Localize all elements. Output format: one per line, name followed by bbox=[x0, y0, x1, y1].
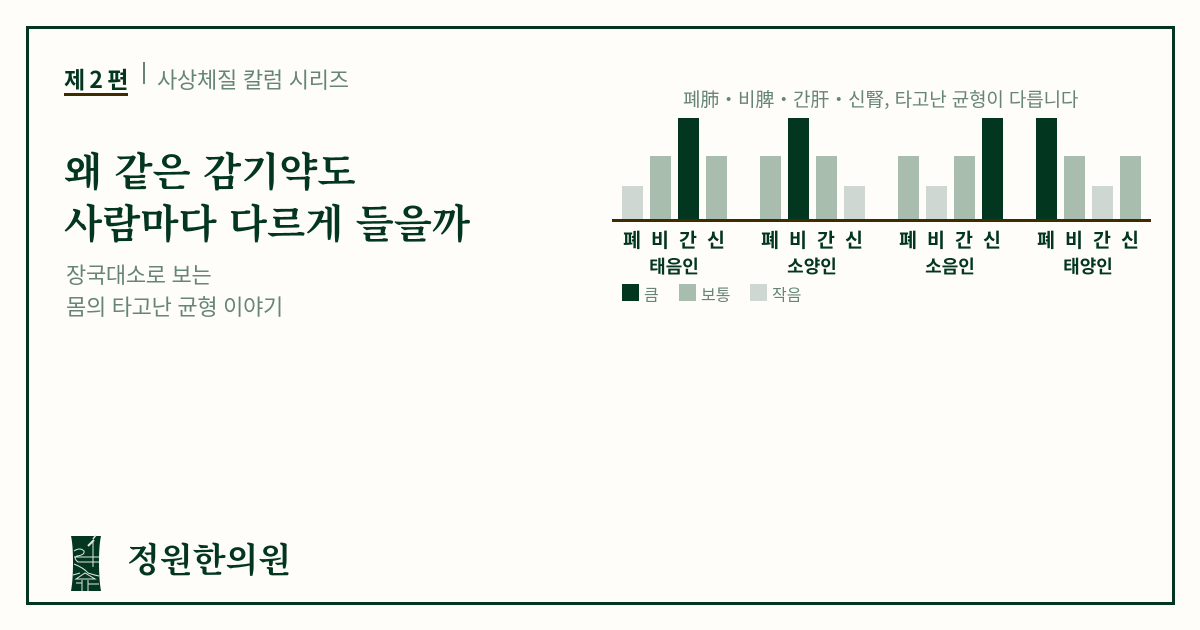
group: 태양인 bars bbox=[1036, 118, 1141, 219]
organ and type labels: 비 bbox=[789, 224, 807, 253]
organ and type labels: 비 bbox=[1065, 224, 1083, 253]
organ and type labels bbox=[623, 224, 1139, 279]
subtitle bbox=[66, 258, 283, 322]
subtitle: 몸의 타고난 균형 이야기 bbox=[66, 290, 283, 322]
group: 태음인 bars bbox=[622, 118, 727, 219]
group: 소양인 bars bbox=[760, 118, 865, 219]
legend bbox=[622, 282, 801, 306]
subtitle: 장국대소로 보는 bbox=[66, 258, 211, 290]
organ and type labels: 간 bbox=[817, 224, 835, 253]
organ and type labels: 간 bbox=[1093, 224, 1111, 253]
legend: 작음 bbox=[772, 282, 801, 306]
organ and type labels: 태양인 bbox=[1063, 253, 1113, 279]
brand name: 정원한의원 bbox=[127, 533, 291, 582]
organ and type labels: 비 bbox=[927, 224, 945, 253]
organ and type labels: 신 bbox=[1121, 224, 1139, 253]
axis line bbox=[612, 219, 1151, 222]
title bbox=[64, 142, 470, 250]
organ and type labels: 소양인 bbox=[787, 253, 837, 279]
chart caption: 폐肺・비脾・간肝・신腎, 타고난 균형이 다릅니다 bbox=[683, 85, 1078, 112]
organ and type labels: 폐 bbox=[1037, 224, 1055, 253]
logo mark bbox=[71, 534, 101, 591]
organ and type labels: 비 bbox=[651, 224, 669, 253]
legend: 보통 bbox=[701, 282, 730, 306]
series name: 사상체질 칼럼 시리즈 bbox=[157, 63, 349, 95]
bar chart bbox=[612, 118, 1151, 306]
group: 소음인 bars bbox=[898, 118, 1003, 219]
title: 사람마다 다르게 들을까 bbox=[64, 194, 470, 250]
series divider bbox=[143, 62, 145, 84]
legend: 큼 bbox=[644, 282, 659, 306]
episode number: 제 2 편 bbox=[64, 61, 127, 95]
organ and type labels: 폐 bbox=[761, 224, 779, 253]
organ and type labels: 신 bbox=[983, 224, 1001, 253]
title: 왜 같은 감기약도 bbox=[64, 142, 356, 198]
organ and type labels: 간 bbox=[679, 224, 697, 253]
organ and type labels: 소음인 bbox=[925, 253, 975, 279]
organ and type labels: 신 bbox=[845, 224, 863, 253]
organ and type labels: 폐 bbox=[623, 224, 641, 253]
organ and type labels: 간 bbox=[955, 224, 973, 253]
organ and type labels: 신 bbox=[707, 224, 725, 253]
organ and type labels: 폐 bbox=[899, 224, 917, 253]
organ and type labels: 태음인 bbox=[649, 253, 699, 279]
